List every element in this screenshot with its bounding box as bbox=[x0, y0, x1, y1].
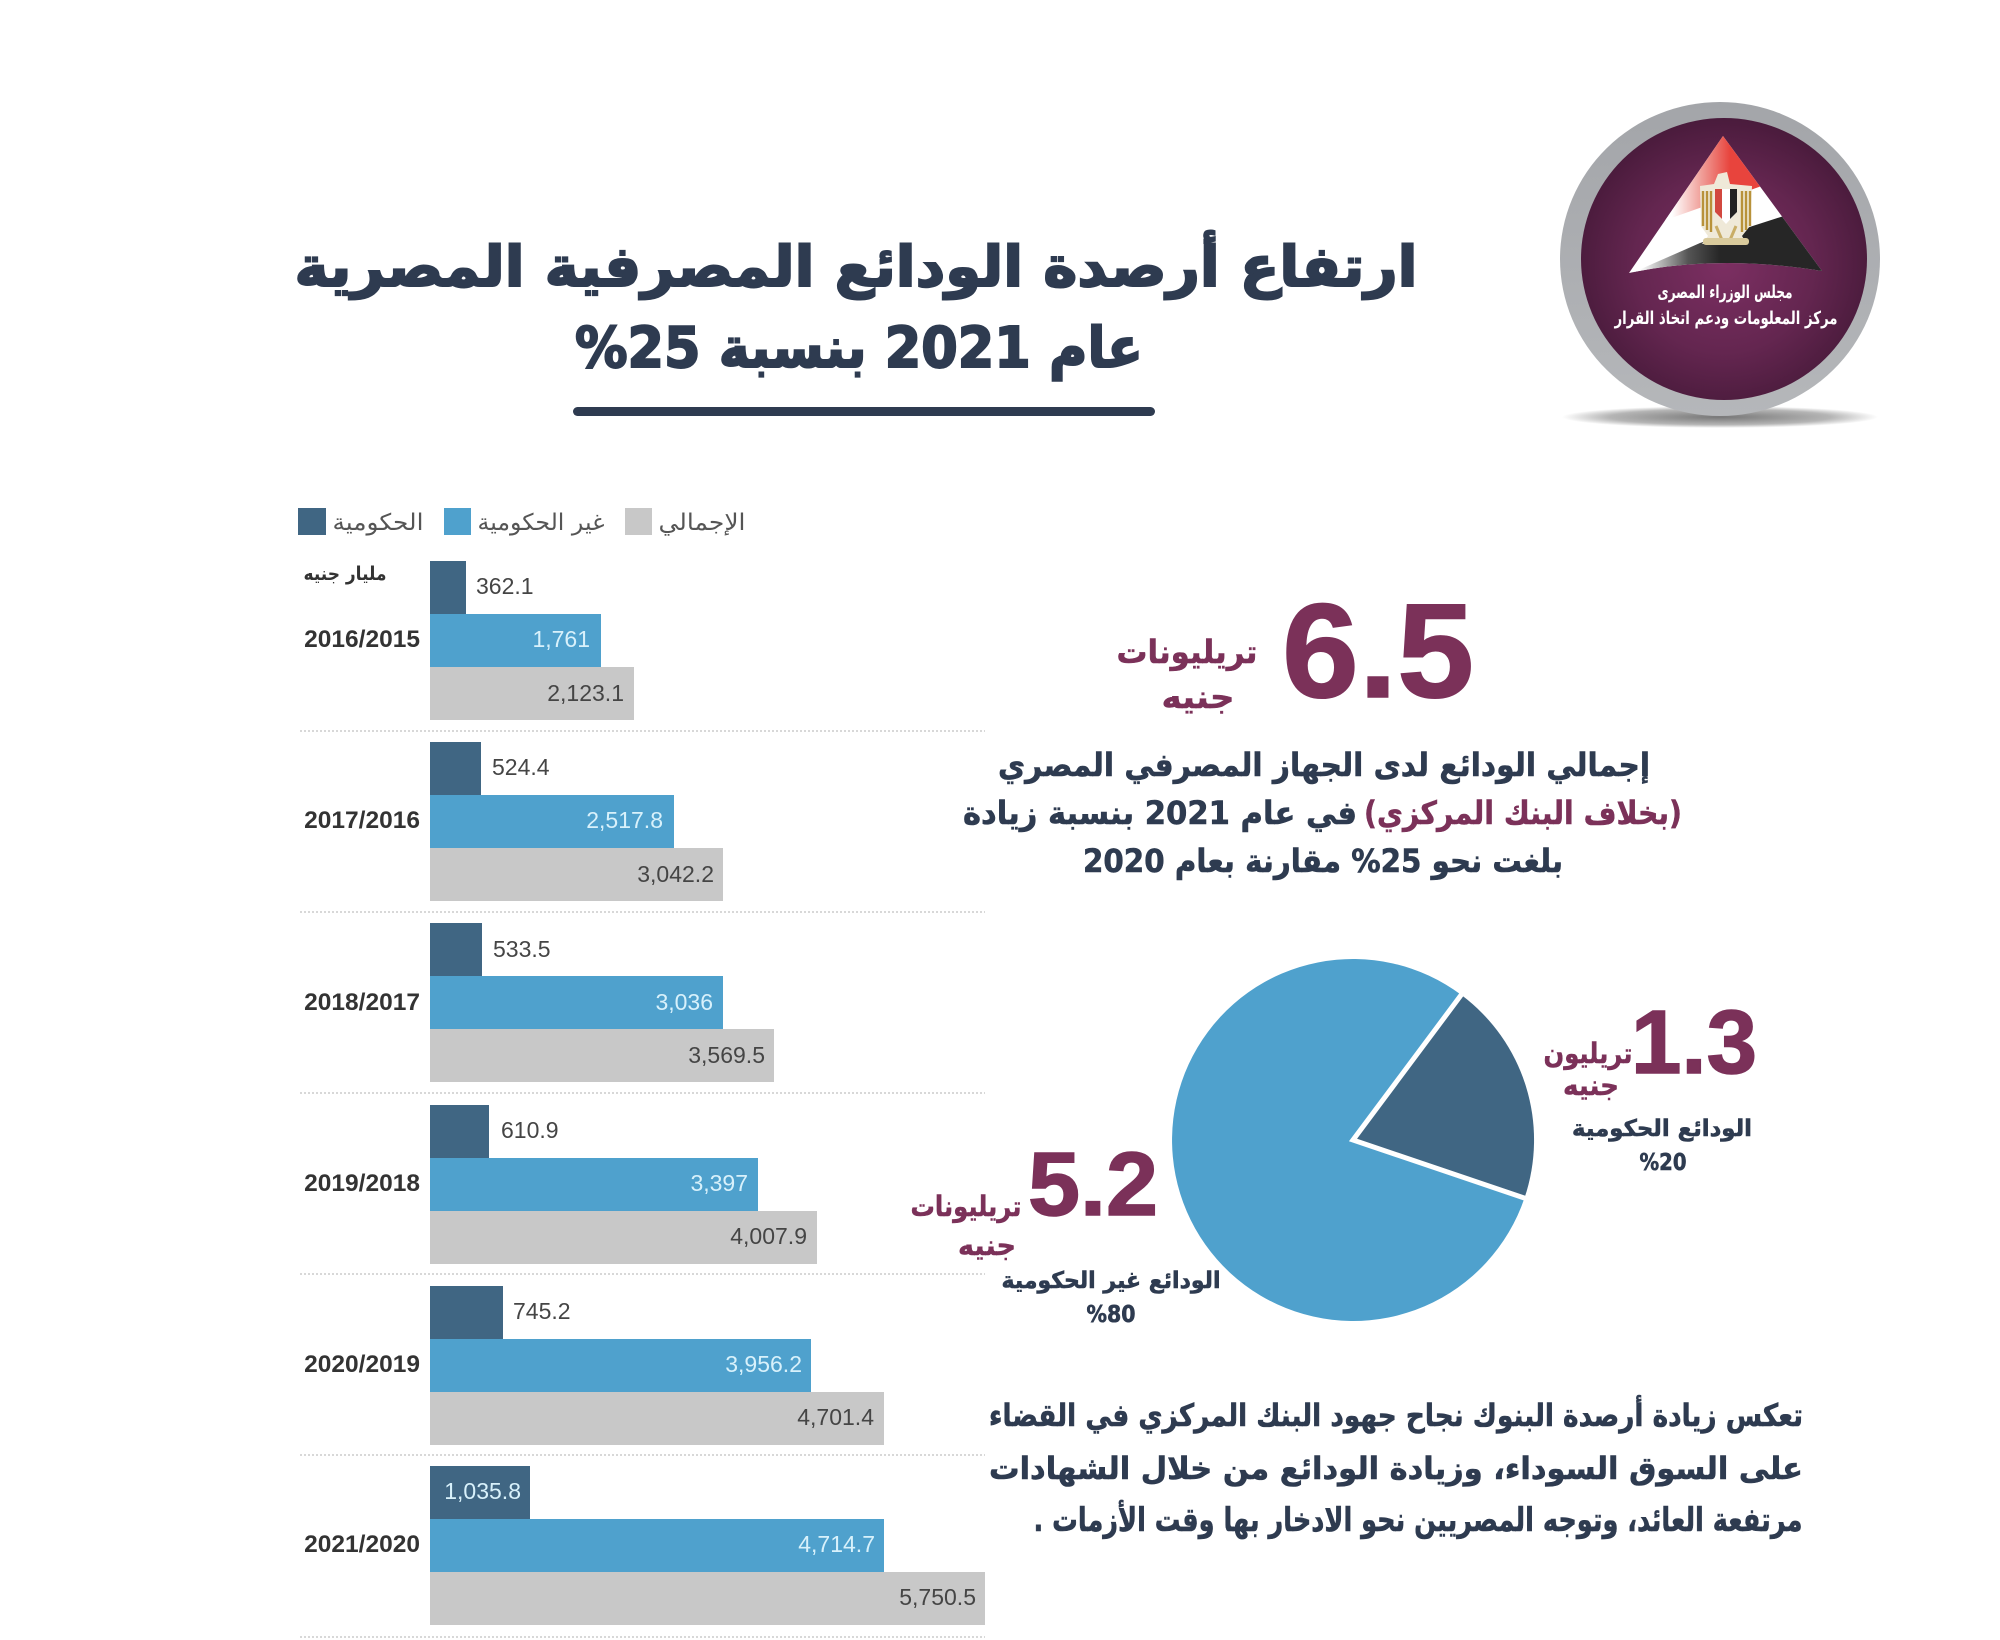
government deposits callout: تريليون bbox=[1544, 1037, 1632, 1070]
government deposits callout bbox=[1544, 993, 1757, 1176]
row 2018/2017: 2018/2017 bbox=[304, 989, 420, 1016]
row 2018/2017: 533.5 bbox=[493, 936, 551, 962]
row 2020/2019 bbox=[304, 1286, 884, 1445]
total deposits description: إجمالي الودائع لدى الجهاز المصرفي المصري bbox=[998, 746, 1650, 785]
government deposits callout: الودائع الحكومية bbox=[1572, 1116, 1752, 1142]
row 2019/2018: 610.9 bbox=[501, 1117, 559, 1143]
logo caption: مجلس الوزراء المصرى bbox=[1658, 282, 1792, 303]
row 2018/2017: 3,036 bbox=[655, 989, 713, 1015]
row 2020/2019: 2020/2019 bbox=[304, 1351, 420, 1378]
logo caption: مركز المعلومات ودعم اتخاذ القرار bbox=[1614, 308, 1838, 329]
non-government deposits callout: تريليونات bbox=[910, 1190, 1022, 1223]
eagle emblem bbox=[1700, 172, 1752, 245]
non-government deposits callout: الودائع غير الحكومية bbox=[1002, 1268, 1220, 1294]
closing paragraph: على السوق السوداء، وزيادة الودائع من خلال الشهادات bbox=[989, 1451, 1803, 1487]
row 2016/2015: 362.1 bbox=[476, 573, 534, 599]
total deposits figure: 6.5 bbox=[1282, 577, 1474, 726]
row 2021/2020: 2021/2020 bbox=[304, 1531, 420, 1558]
row 2018/2017 bbox=[304, 923, 774, 1082]
row 2021/2020: 1,035.8 bbox=[444, 1478, 521, 1504]
non-government deposits callout bbox=[910, 1135, 1220, 1328]
row 2019/2018: 2019/2018 bbox=[304, 1170, 420, 1197]
logo: cabinet information and decision support center bbox=[1560, 102, 1880, 428]
unit label: مليار جنيه bbox=[304, 563, 386, 585]
total deposits figure bbox=[1116, 577, 1474, 726]
flag triangle bbox=[1629, 136, 1822, 273]
row 2021/2020 bbox=[304, 1466, 985, 1625]
row 2017/2016: 524.4 bbox=[492, 754, 550, 780]
total deposits description: (بخلاف البنك المركزي) bbox=[1364, 794, 1682, 832]
row 2020/2019: 745.2 bbox=[513, 1298, 571, 1324]
closing paragraph: مرتفعة العائد، وتوجه المصريين نحو الادخار بها وقت الأزمات . bbox=[1034, 1499, 1802, 1540]
non-government deposits callout: جنيه bbox=[958, 1229, 1016, 1262]
row 2017/2016: 2017/2016 bbox=[304, 807, 420, 834]
row 2021/2020: 4,714.7 bbox=[798, 1531, 875, 1557]
closing paragraph bbox=[989, 1395, 1803, 1540]
non-government deposits callout: 5.2 bbox=[1028, 1135, 1158, 1235]
logo caption bbox=[1614, 282, 1838, 329]
total deposits figure: تريليونات bbox=[1116, 633, 1258, 671]
chart legend bbox=[298, 508, 746, 536]
row 2019/2018: 4,007.9 bbox=[730, 1223, 807, 1249]
row 2021/2020: 5,750.5 bbox=[899, 1584, 976, 1610]
bar chart bbox=[300, 561, 985, 1637]
government deposits callout: جنيه bbox=[1563, 1069, 1619, 1102]
total deposits description: في عام 2021 بنسبة زيادة bbox=[963, 794, 1357, 832]
row 2019/2018 bbox=[304, 1105, 817, 1264]
infographic canvas bbox=[297, 102, 1880, 1638]
row 2016/2015: 2,123.1 bbox=[547, 680, 624, 706]
title: عام 2021 بنسبة ⁦%25⁩ bbox=[575, 316, 1143, 381]
chart legend: الإجمالي bbox=[658, 510, 746, 536]
government deposits callout: %20 bbox=[1640, 1150, 1686, 1176]
row 2016/2015 bbox=[304, 561, 634, 720]
total deposits figure: جنيه bbox=[1162, 678, 1234, 716]
title underline bbox=[573, 407, 1155, 416]
total deposits description: بلغت نحو 25% مقارنة بعام 2020 bbox=[1083, 842, 1563, 880]
closing paragraph: تعكس زيادة أرصدة البنوك نجاح جهود البنك المركزي في القضاء bbox=[989, 1395, 1803, 1434]
row 2017/2016: 2,517.8 bbox=[586, 807, 663, 833]
row 2018/2017: 3,569.5 bbox=[688, 1042, 765, 1068]
row 2016/2015: 1,761 bbox=[532, 626, 590, 652]
chart legend: غير الحكومية bbox=[478, 510, 604, 536]
row 2016/2015: 2016/2015 bbox=[304, 626, 420, 653]
non-government deposits callout: %80 bbox=[1086, 1302, 1136, 1328]
row 2020/2019: 3,956.2 bbox=[725, 1351, 802, 1377]
row 2020/2019: 4,701.4 bbox=[797, 1404, 874, 1430]
row 2017/2016: 3,042.2 bbox=[637, 861, 714, 887]
government deposits callout: 1.3 bbox=[1631, 993, 1757, 1093]
total deposits description bbox=[963, 746, 1682, 880]
pie chart bbox=[1172, 959, 1534, 1321]
title: ارتفاع أرصدة الودائع المصرفية المصرية bbox=[294, 230, 1418, 300]
chart legend: الحكومية bbox=[332, 510, 424, 536]
row 2017/2016 bbox=[304, 742, 723, 901]
title bbox=[294, 230, 1418, 381]
row 2019/2018: 3,397 bbox=[690, 1170, 748, 1196]
